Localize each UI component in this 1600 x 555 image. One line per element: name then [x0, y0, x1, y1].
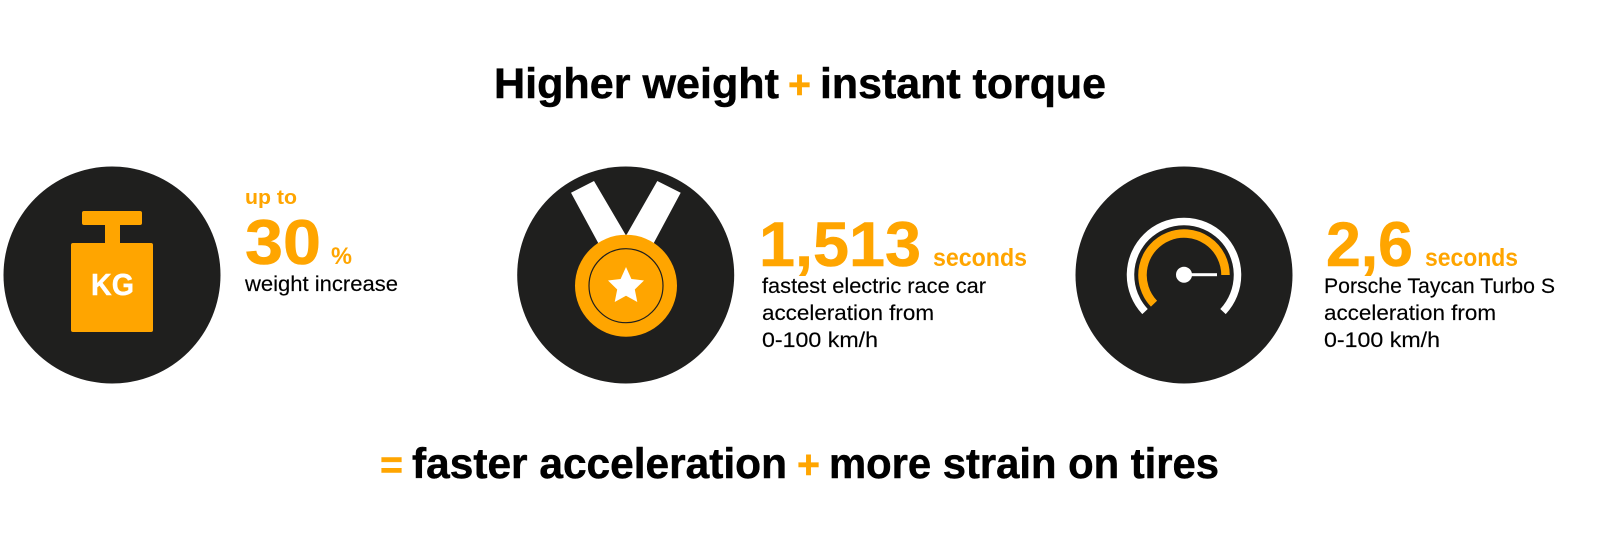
title — [494, 60, 1106, 108]
title: instant torque — [820, 60, 1106, 108]
text: 2,6 seconds — [1324, 210, 1555, 352]
icon: speedometer — [1076, 166, 1292, 384]
text: 2,6 seconds: 0-100 km/h — [1324, 328, 1440, 352]
text: 2,6 seconds: 2,6 — [1326, 210, 1413, 280]
conclusion heading: = — [380, 443, 403, 487]
text: up to 30 % weight increase: % — [331, 243, 352, 270]
conclusion heading: more strain on tires — [829, 440, 1219, 488]
panel: fastest electric race car — [517, 166, 1027, 384]
panel: Porsche Taycan Turbo S — [1076, 166, 1555, 384]
text: up to 30 % weight increase: weight increase — [244, 272, 398, 296]
icon: kilogram weight — [4, 166, 220, 384]
conclusion heading: + — [797, 443, 820, 487]
text: 2,6 seconds: seconds — [1425, 244, 1518, 272]
panel: weight increase — [4, 166, 398, 384]
title: + — [788, 63, 811, 107]
text: up to 30 % weight increase: 30 — [245, 208, 321, 278]
text: 2,6 seconds: Porsche Taycan Turbo S — [1324, 274, 1555, 298]
text: 1,513 seconds: seconds — [933, 244, 1027, 272]
text: up to 30 % weight increase — [244, 187, 398, 296]
text: up to 30 % weight increase: up to — [245, 187, 297, 209]
text: 2,6 seconds: acceleration from — [1324, 301, 1496, 325]
title: Higher weight — [494, 60, 779, 108]
text: 1,513 seconds — [759, 210, 1027, 352]
text: 1,513 seconds: acceleration from — [762, 301, 934, 325]
text: 1,513 seconds: 0-100 km/h — [762, 328, 878, 352]
text: 1,513 seconds: fastest electric race car — [762, 274, 986, 298]
icon: kilogram weight: KG — [91, 267, 134, 302]
icon: medal — [517, 166, 734, 384]
conclusion heading: faster acceleration — [412, 440, 787, 488]
text: 1,513 seconds: 1,513 — [759, 210, 921, 280]
conclusion heading — [380, 440, 1219, 488]
